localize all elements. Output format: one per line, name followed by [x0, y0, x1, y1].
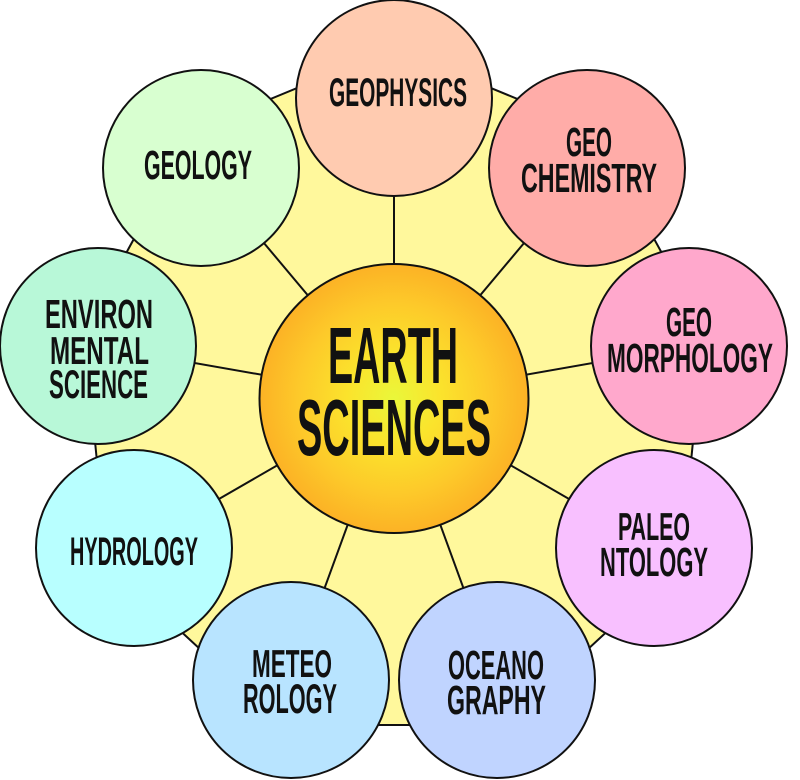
node: hydrology: [36, 450, 232, 646]
node: geochemistry: CHEMISTRY: [521, 155, 657, 201]
node: geomorphology: [591, 248, 787, 444]
connector spokes: [98, 98, 689, 680]
node: meteorology: METEO: [252, 643, 332, 686]
node: oceanography: OCEANO: [448, 642, 544, 688]
node: geophysics: [296, 0, 492, 196]
node: geochemistry: GEO: [566, 119, 612, 165]
node: meteorology: [193, 582, 389, 778]
node: meteorology: ROLOGY: [243, 675, 337, 722]
yellow background polygon: [84, 48, 704, 725]
node: environmental science: ENVIRON: [45, 291, 153, 337]
node: environmental science: SCIENCE: [49, 363, 148, 407]
node: oceanography: [399, 582, 595, 778]
node: paleontology: [556, 450, 752, 646]
node: geology: [103, 70, 299, 266]
node: paleontology: NTOLOGY: [600, 539, 708, 585]
node: geology: GEOLOGY: [144, 142, 252, 188]
central circle: earth sciences: [260, 264, 528, 533]
central circle: earth sciences: SCIENCES: [297, 383, 491, 472]
node: hydrology: HYDROLOGY: [70, 530, 198, 574]
node: environmental science: [0, 248, 196, 444]
central circle: earth sciences: EARTH: [328, 311, 458, 400]
node: environmental science: MENTAL: [50, 330, 149, 373]
node: geochemistry: [489, 70, 685, 266]
node: oceanography: GRAPHY: [447, 677, 546, 723]
node: geomorphology: GEO: [666, 299, 712, 345]
node: geophysics: GEOPHYSICS: [329, 71, 467, 115]
node: paleontology: PALEO: [618, 506, 690, 549]
